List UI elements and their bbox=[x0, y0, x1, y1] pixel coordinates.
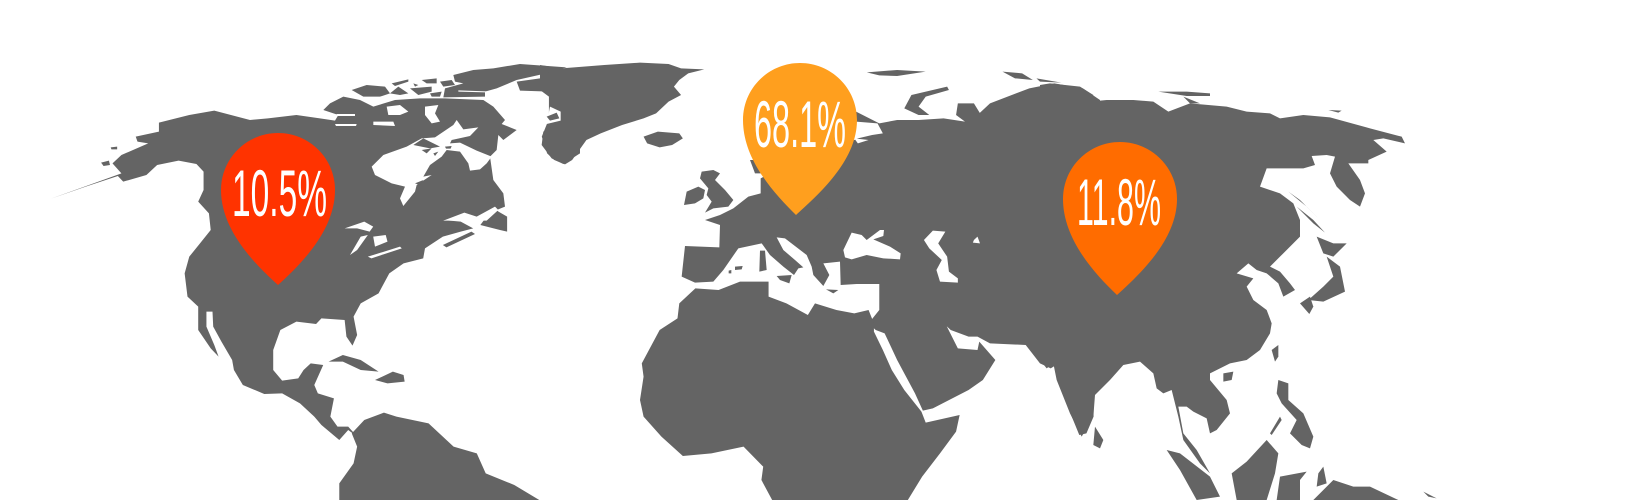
pin: 11.8%: 11.8% bbox=[1077, 165, 1161, 239]
water: Black Sea bbox=[843, 230, 901, 259]
pin: 68.1% bbox=[743, 63, 857, 215]
pin: 68.1%: 68.1% bbox=[754, 87, 846, 161]
map: Asia, Africa and Arabia bbox=[540, 63, 1100, 500]
pin: 10.5% bbox=[221, 133, 335, 285]
map: inland water bbox=[345, 138, 980, 283]
pin: 11.8% bbox=[1063, 142, 1177, 295]
water: Great Lakes bbox=[345, 222, 402, 258]
pin: 10.5%: 10.5% bbox=[232, 156, 327, 230]
map: eastern Asia and Oceania bbox=[1040, 83, 1437, 500]
water: Caspian and Aral seas bbox=[854, 138, 980, 283]
map: Europe and Turkey bbox=[682, 160, 883, 293]
map: Americas bbox=[51, 111, 539, 500]
world map bbox=[51, 63, 1437, 500]
map: Arctic Canada, Hudson Bay and western Greenland bbox=[320, 64, 580, 221]
